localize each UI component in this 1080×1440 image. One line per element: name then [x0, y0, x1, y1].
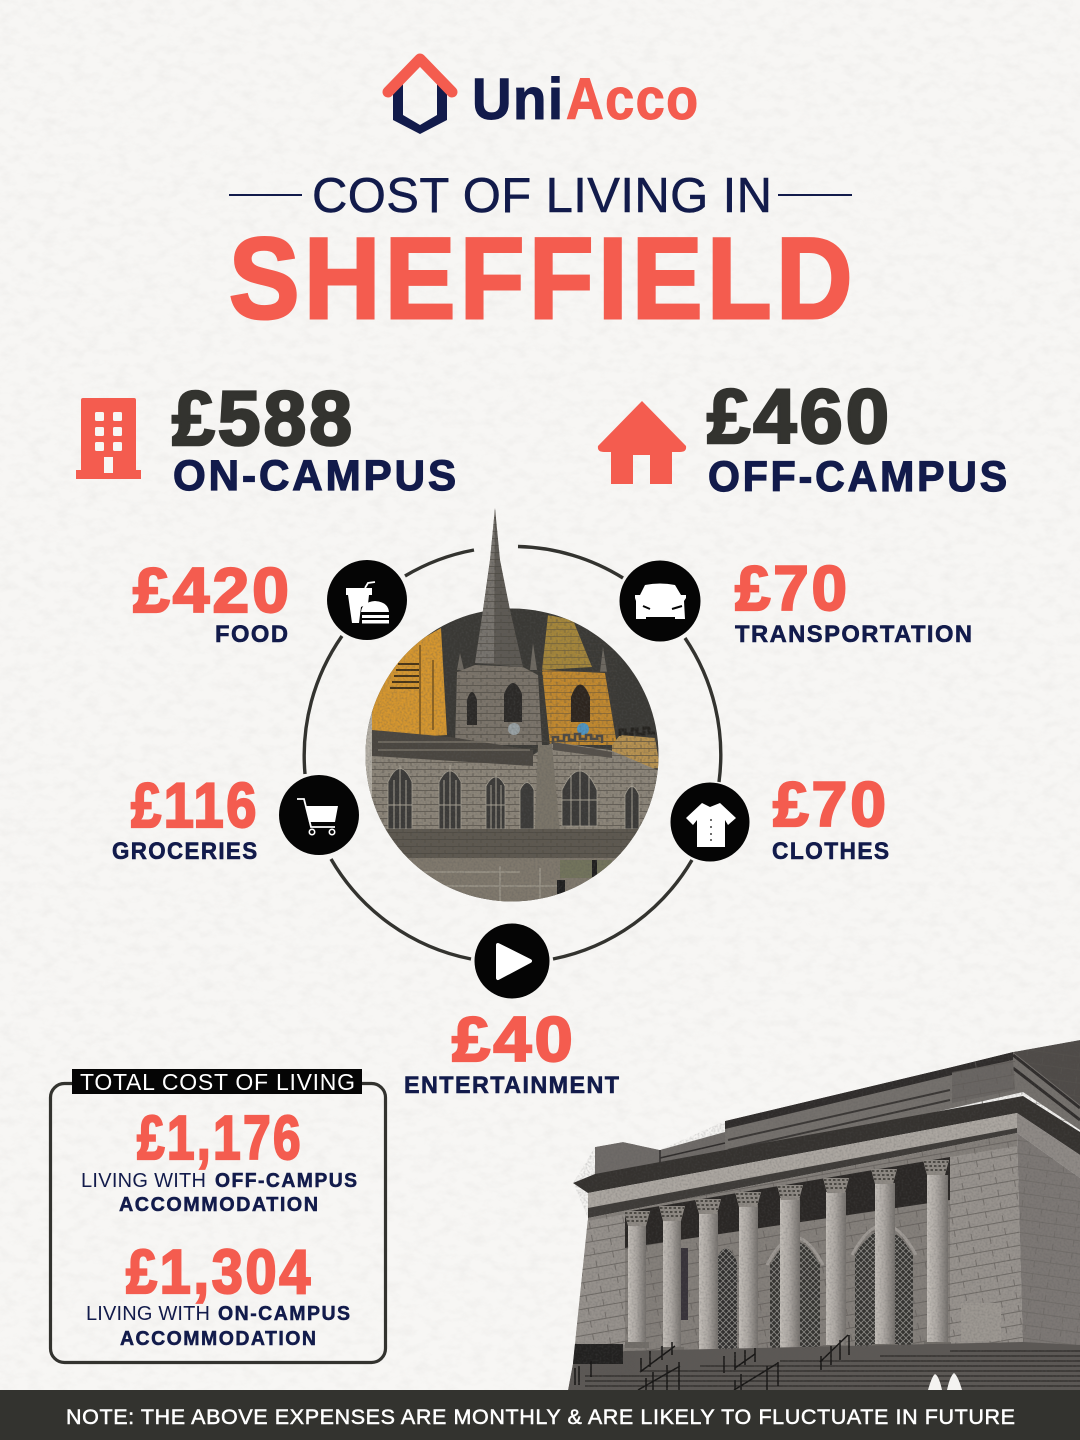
panel outline — [50, 1084, 386, 1362]
caption: on-campus — [86, 1303, 352, 1350]
side walls — [1017, 1113, 1080, 1178]
photo: Sheffield Cathedral — [360, 505, 665, 908]
amount: £70 — [773, 770, 889, 840]
entablature — [588, 1113, 1017, 1218]
stat: groceries — [112, 771, 259, 865]
stat: clothes — [772, 770, 890, 865]
label: GROCERIES — [112, 838, 258, 865]
icon: house — [598, 401, 686, 484]
icon: apartment building — [76, 398, 141, 479]
amount: 460 pounds: £460 — [707, 374, 892, 460]
piers — [950, 1146, 1023, 1350]
columns — [628, 1175, 948, 1356]
logo: UniAcco — [388, 59, 700, 134]
front wall — [573, 1133, 1023, 1363]
label: TRANSPORTATION — [735, 621, 974, 648]
caption: off-campus — [81, 1170, 358, 1216]
label: ENTERTAINMENT — [404, 1072, 620, 1099]
panel: total cost of living — [50, 1069, 386, 1362]
amount: on-campus total: £1,304 — [126, 1238, 313, 1307]
stat: entertainment — [404, 1005, 620, 1099]
roof and attic — [1013, 1040, 1080, 1105]
left orange tower — [372, 628, 447, 740]
subtitle: cost of living in: COST OF LIVING IN — [312, 169, 772, 223]
battlement band — [372, 730, 533, 766]
amount: £420 — [133, 556, 292, 626]
illustration: Sheffield City Hall — [568, 1040, 1080, 1390]
footer note: NOTE: THE ABOVE EXPENSES ARE MONTHLY & ARE LIKELY TO FLUCTUATE IN FUTURE — [66, 1405, 1015, 1429]
amount: 588 pounds: £588 — [172, 376, 355, 462]
orange spire and tower — [542, 615, 592, 670]
slit window — [681, 1248, 688, 1320]
amount: off-campus total: £1,176 — [137, 1104, 303, 1173]
caption: on-campus: ON-CAMPUS — [218, 1303, 352, 1325]
caption: on-campus: LIVING WITH — [86, 1303, 210, 1325]
logo wordmark: Uni — [472, 67, 564, 132]
plinth stone — [961, 1303, 1001, 1341]
label: on-campus: ON-CAMPUS — [173, 452, 459, 500]
dark cornice — [573, 1096, 1080, 1193]
capitals — [624, 1160, 949, 1226]
icon: car — [620, 560, 700, 642]
stat: transportation — [735, 554, 974, 648]
stained windows — [388, 768, 639, 829]
base shadow — [386, 829, 638, 860]
pinnacles — [457, 643, 607, 672]
amount: £116 — [131, 771, 259, 841]
amount: £70 — [735, 554, 850, 624]
low wall — [573, 1344, 623, 1364]
wet ground — [408, 858, 616, 902]
panel: on-campus rent — [76, 376, 459, 500]
label: off-campus: OFF-CAMPUS — [708, 453, 1010, 501]
footer note — [0, 1390, 1080, 1440]
steps — [568, 1342, 1080, 1390]
icon: logo house — [388, 59, 452, 134]
icon: food — [327, 560, 407, 640]
caption: off-campus: OFF-CAMPUS — [215, 1170, 358, 1192]
logo wordmark: Acco — [566, 67, 700, 132]
nave wall — [360, 735, 662, 870]
left stone edge — [366, 712, 372, 798]
logo wordmark — [472, 67, 700, 132]
panel heading: TOTAL COST OF LIVING — [80, 1069, 355, 1095]
main tower — [455, 665, 542, 745]
right side orange gable — [612, 735, 660, 770]
stat: food — [133, 556, 292, 648]
icon: shopping cart — [279, 775, 359, 855]
caption: off-campus: ACCOMMODATION — [119, 1194, 320, 1216]
portico ceiling shadow — [625, 1157, 950, 1248]
buttress — [535, 745, 560, 829]
chart: expense ring — [0, 505, 1080, 1440]
fountains — [928, 1373, 962, 1390]
spire — [475, 508, 523, 667]
doors — [715, 1225, 916, 1355]
caption: on-campus: ACCOMMODATION — [120, 1328, 318, 1350]
amount: £40 — [452, 1005, 576, 1075]
title — [229, 169, 857, 343]
label: CLOTHES — [772, 838, 890, 865]
panel: off-campus rent — [598, 374, 1010, 501]
caption: off-campus: LIVING WITH — [81, 1170, 206, 1192]
label: FOOD — [215, 621, 290, 648]
railings — [575, 1335, 849, 1390]
ring arcs — [304, 546, 721, 959]
column bases — [625, 1342, 951, 1350]
icon: t-shirt — [670, 782, 750, 862]
icon: play — [474, 924, 550, 998]
heading: Sheffield: SHEFFIELD — [229, 215, 857, 343]
